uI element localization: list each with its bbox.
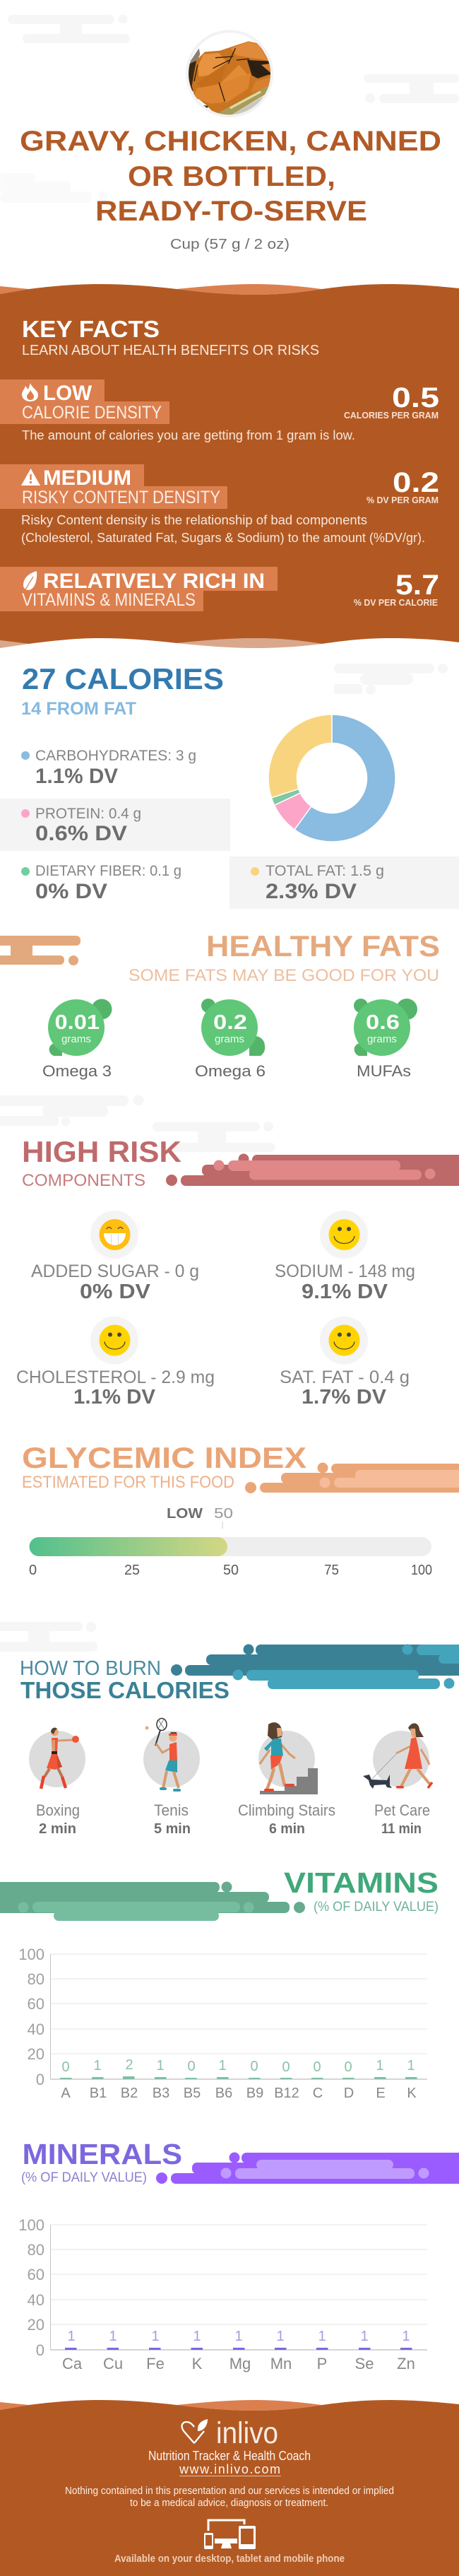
bar chart: vitamins: E: [376, 2086, 386, 2101]
bar chart: minerals: Mg: [230, 2355, 251, 2372]
activity: boxing: [29, 1728, 85, 1837]
legend: carbohydrates: 1.1% DV: [35, 765, 118, 788]
glycemic index gauge: LOW: [167, 1506, 203, 1522]
bar chart: minerals: 20: [28, 2316, 44, 2334]
fact: low calorie density: CALORIE DENSITY: [22, 403, 162, 423]
activity: pet care: [363, 1723, 432, 1837]
bar chart: minerals: 100: [18, 2216, 44, 2234]
bar chart: vitamins: 60: [28, 1995, 44, 2013]
bar chart: minerals: 80: [28, 2241, 44, 2259]
activity: pet care: 11 min: [381, 1821, 422, 1837]
item: sodium: SODIUM - 148 mg: [275, 1261, 415, 1281]
bar chart: minerals: Ca: [62, 2355, 83, 2372]
icon: warning triangle: [21, 469, 40, 486]
bar chart: vitamins: B1: [90, 2086, 107, 2101]
activity: climbing stairs: 6 min: [269, 1821, 305, 1837]
bar chart: vitamins: 1: [156, 2058, 165, 2074]
fact: medium risky content density: (Cholesterol, Saturated Fat, Sugars & Sodium) to the amount (%DV/gr).: [21, 531, 425, 545]
stat: omega 3: Omega 3: [42, 1062, 112, 1080]
decorative band: healthy fats: [0, 936, 81, 965]
panel: footer: [0, 2400, 459, 2576]
subheading: glycemic index: ESTIMATED FOR THIS FOOD: [22, 1473, 234, 1492]
decorative band: burn calories: [171, 1644, 459, 1689]
stat: omega 6: grams: [215, 1033, 244, 1045]
stat: omega 3: grams: [61, 1033, 91, 1045]
bar chart: vitamins: 1: [376, 2058, 384, 2074]
bar chart: vitamins: A: [61, 2086, 71, 2101]
fact: medium risky content density: Risky Content density is the relationship of bad components: [21, 513, 367, 527]
bar chart: vitamins: 0: [61, 2059, 70, 2075]
bar chart: vitamins: D: [344, 2086, 354, 2101]
fact: medium risky content density: [0, 464, 439, 545]
bar chart: vitamins: K: [407, 2086, 417, 2101]
heading: healthy fats: HEALTHY FATS: [206, 929, 440, 963]
bar chart: minerals: 0: [36, 2341, 44, 2359]
stat: omega 3: 0.01: [55, 1011, 100, 1034]
logo: inlivo: inlivo: [216, 2416, 278, 2450]
bar chart: minerals: Fe: [146, 2355, 165, 2372]
bar chart: minerals: 1: [318, 2329, 326, 2344]
bar chart: vitamins: 2: [125, 2057, 133, 2073]
activity: climbing stairs: [238, 1722, 335, 1837]
bar chart: minerals: Se: [355, 2355, 374, 2372]
icon: smiling face: [90, 1316, 138, 1364]
logo: inlivo: [182, 2416, 278, 2450]
activity: boxing: 2 min: [39, 1821, 76, 1837]
title: OR BOTTLED,: [128, 161, 335, 192]
legend: total fat: TOTAL FAT: 1.5 g: [266, 863, 384, 879]
bar chart: vitamins: B5: [184, 2086, 201, 2101]
bar chart: vitamins: B2: [121, 2086, 138, 2101]
item: saturated fat: [280, 1316, 410, 1408]
icon: tennis player: [143, 1719, 200, 1792]
heading: minerals: MINERALS: [23, 2138, 182, 2170]
bar chart: vitamins: B6: [215, 2086, 232, 2101]
subheading: calories from fat: 14 FROM FAT: [21, 699, 136, 719]
title: GRAVY, CHICKEN, CANNED: [20, 126, 441, 157]
glycemic index gauge: 0: [29, 1563, 37, 1578]
item: saturated fat: 1.7% DV: [302, 1386, 387, 1408]
panel: footer: Nutrition Tracker & Health Coach: [148, 2449, 311, 2463]
fact: medium risky content density: 0.2: [393, 467, 439, 498]
subheading: components: COMPONENTS: [22, 1171, 145, 1190]
donut chart: [268, 714, 395, 842]
bar chart: minerals: 1: [234, 2329, 243, 2344]
heading: how to burn those calories: HOW TO BURN: [20, 1657, 161, 1680]
fact: relatively rich in vitamins and minerals: RELATIVELY RICH IN: [43, 570, 265, 593]
bar chart: minerals: Zn: [397, 2355, 415, 2372]
bar chart: minerals: P: [317, 2355, 327, 2372]
bar chart: vitamins: B3: [153, 2086, 169, 2101]
fact: medium risky content density: RISKY CONTENT DENSITY: [22, 488, 220, 507]
stat: omega 3: [42, 999, 112, 1080]
bar chart: minerals: Mn: [270, 2355, 292, 2372]
icon: grinning face: [90, 1211, 138, 1259]
activity: tennis: Tenis: [154, 1801, 189, 1819]
icon: woman climbing stairs: [258, 1722, 318, 1794]
item: cholesterol: [16, 1316, 215, 1408]
icon: flame: [22, 383, 38, 401]
decorative band: glycemic index: [245, 1463, 459, 1493]
decorative band: high risk: [166, 1153, 459, 1186]
panel: key facts: [0, 284, 459, 648]
disclaimer: [65, 2485, 394, 2509]
heading: key facts: KEY FACTS: [22, 316, 160, 342]
glycemic index gauge: 100: [411, 1563, 432, 1578]
subheading: key facts: LEARN ABOUT HEALTH BENEFITS OR RISKS: [22, 343, 319, 358]
icon: woman walking dog: [363, 1723, 432, 1789]
bar chart: minerals: 1: [402, 2329, 410, 2344]
bar chart: vitamins: [18, 1946, 427, 2101]
glycemic index gauge: 50: [214, 1506, 233, 1522]
legend: protein: [0, 799, 230, 851]
glycemic index gauge: 25: [124, 1563, 140, 1578]
fact: relatively rich in vitamins and minerals: % DV PER CALORIE: [354, 597, 438, 608]
decorative band: minerals: [156, 2153, 459, 2184]
legend: protein: 0.6% DV: [35, 822, 127, 845]
fact: low calorie density: [0, 380, 439, 442]
heading: calories: 27 CALORIES: [22, 662, 224, 695]
activity: boxing: Boxing: [36, 1801, 80, 1819]
icon: devices: [204, 2520, 256, 2549]
bar chart: vitamins: 0: [250, 2059, 258, 2074]
bar chart: minerals: Cu: [103, 2355, 123, 2372]
bar chart: vitamins: 1: [407, 2058, 415, 2074]
bar chart: minerals: 1: [151, 2329, 160, 2344]
glycemic index gauge: 50: [223, 1563, 239, 1578]
decorative band: vitamins: [0, 1881, 305, 1921]
fact: relatively rich in vitamins and minerals: [0, 567, 439, 611]
bar chart: vitamins: 0: [313, 2059, 321, 2075]
bar chart: vitamins: 80: [28, 1970, 44, 1988]
icon: leaf: [23, 571, 37, 590]
legend: carbohydrates: CARBOHYDRATES: 3 g: [35, 748, 196, 764]
fact: relatively rich in vitamins and minerals: VITAMINS & MINERALS: [22, 590, 196, 610]
fact: medium risky content density: % DV PER GRAM: [366, 495, 439, 505]
bar chart: vitamins: 1: [93, 2058, 102, 2074]
bar chart: vitamins: 0: [36, 2071, 44, 2088]
bar chart: vitamins: C: [313, 2086, 323, 2101]
bar chart: minerals: 1: [67, 2329, 76, 2344]
item: added sugar: ADDED SUGAR - 0 g: [31, 1261, 199, 1281]
food photo: [186, 30, 273, 117]
fact: low calorie density: The amount of calories you are getting from 1 gram is low.: [22, 428, 355, 442]
glycemic index gauge: [29, 1506, 432, 1578]
stat: mufas: MUFAs: [357, 1062, 411, 1080]
legend: total fat: 2.3% DV: [266, 880, 357, 903]
panel: footer: Available on your desktop, tablet and mobile phone: [114, 2553, 345, 2565]
item: sodium: 9.1% DV: [302, 1281, 388, 1303]
subheading: healthy fats: SOME FATS MAY BE GOOD FOR YOU: [129, 966, 439, 985]
icon: boxer: [29, 1728, 85, 1789]
serving size: Cup (57 g / 2 oz): [170, 237, 290, 252]
disclaimer: to be a medical advice, diagnosis or treatment.: [130, 2497, 328, 2509]
item: cholesterol: 1.1% DV: [73, 1386, 156, 1408]
bar chart: vitamins: 0: [282, 2059, 290, 2075]
title: [20, 126, 441, 227]
heading: how to burn those calories: [20, 1657, 230, 1703]
activity: tennis: 5 min: [154, 1821, 191, 1837]
item: added sugar: 0% DV: [80, 1281, 151, 1303]
item: cholesterol: CHOLESTEROL - 2.9 mg: [16, 1368, 215, 1387]
bar chart: minerals: 1: [193, 2329, 201, 2344]
fact: relatively rich in vitamins and minerals: 5.7: [395, 570, 439, 601]
bar chart: minerals: 40: [28, 2291, 44, 2309]
activity: climbing stairs: Climbing Stairs: [238, 1801, 335, 1819]
fact: low calorie density: CALORIES PER GRAM: [344, 410, 439, 420]
icon: smiling face: [320, 1316, 368, 1364]
stat: omega 6: [195, 999, 266, 1080]
bar chart: minerals: 1: [360, 2329, 369, 2344]
activity: tennis: [143, 1719, 200, 1837]
heading: vitamins: VITAMINS: [284, 1866, 439, 1899]
fact: medium risky content density: MEDIUM: [43, 466, 131, 490]
link: website: www.inlivo.com: [179, 2462, 280, 2476]
subheading: vitamins: (% OF DAILY VALUE): [314, 1900, 439, 1915]
bar chart: vitamins: B12: [274, 2086, 299, 2101]
stat: omega 6: 0.2: [213, 1011, 247, 1034]
stat: mufas: 0.6: [366, 1011, 400, 1034]
bar chart: minerals: 1: [109, 2329, 117, 2344]
title: READY-TO-SERVE: [95, 196, 367, 227]
legend: dietary fiber: 0% DV: [35, 880, 107, 903]
fact: low calorie density: 0.5: [392, 382, 439, 413]
fact: low calorie density: LOW: [43, 382, 93, 405]
glycemic index gauge: 75: [324, 1563, 339, 1578]
heading: high risk: HIGH RISK: [22, 1135, 181, 1168]
legend: dietary fiber: DIETARY FIBER: 0.1 g: [35, 863, 181, 879]
bar chart: minerals: K: [192, 2355, 203, 2372]
activity: pet care: Pet Care: [374, 1801, 430, 1819]
stat: mufas: grams: [367, 1033, 397, 1045]
legend: total fat: [230, 857, 459, 909]
icon: smiling face: [320, 1211, 368, 1259]
heading: glycemic index: GLYCEMIC INDEX: [22, 1441, 306, 1474]
subheading: minerals: (% OF DAILY VALUE): [21, 2170, 147, 2185]
bar chart: minerals: 60: [28, 2266, 44, 2283]
bar chart: vitamins: 100: [18, 1946, 44, 1963]
item: sodium: [275, 1211, 415, 1303]
stat: omega 6: Omega 6: [195, 1062, 266, 1080]
bar chart: vitamins: 20: [28, 2045, 44, 2063]
bar chart: minerals: 1: [276, 2329, 285, 2344]
legend: protein: PROTEIN: 0.4 g: [35, 806, 141, 822]
legend: dietary fiber: [21, 863, 181, 903]
bar chart: vitamins: 40: [28, 2021, 44, 2038]
item: saturated fat: SAT. FAT - 0.4 g: [280, 1368, 410, 1387]
bar chart: vitamins: 0: [344, 2059, 352, 2075]
legend: carbohydrates: [21, 748, 196, 788]
bar chart: minerals: [18, 2216, 427, 2372]
bar chart: vitamins: 1: [218, 2058, 227, 2074]
heading: how to burn those calories: THOSE CALORIES: [20, 1677, 230, 1703]
bar chart: vitamins: 0: [187, 2059, 196, 2074]
item: added sugar: [31, 1211, 199, 1303]
bar chart: vitamins: B9: [246, 2086, 263, 2101]
stat: mufas: [354, 999, 417, 1080]
disclaimer: Nothing contained in this presentation and our services is intended or implied: [65, 2485, 394, 2497]
